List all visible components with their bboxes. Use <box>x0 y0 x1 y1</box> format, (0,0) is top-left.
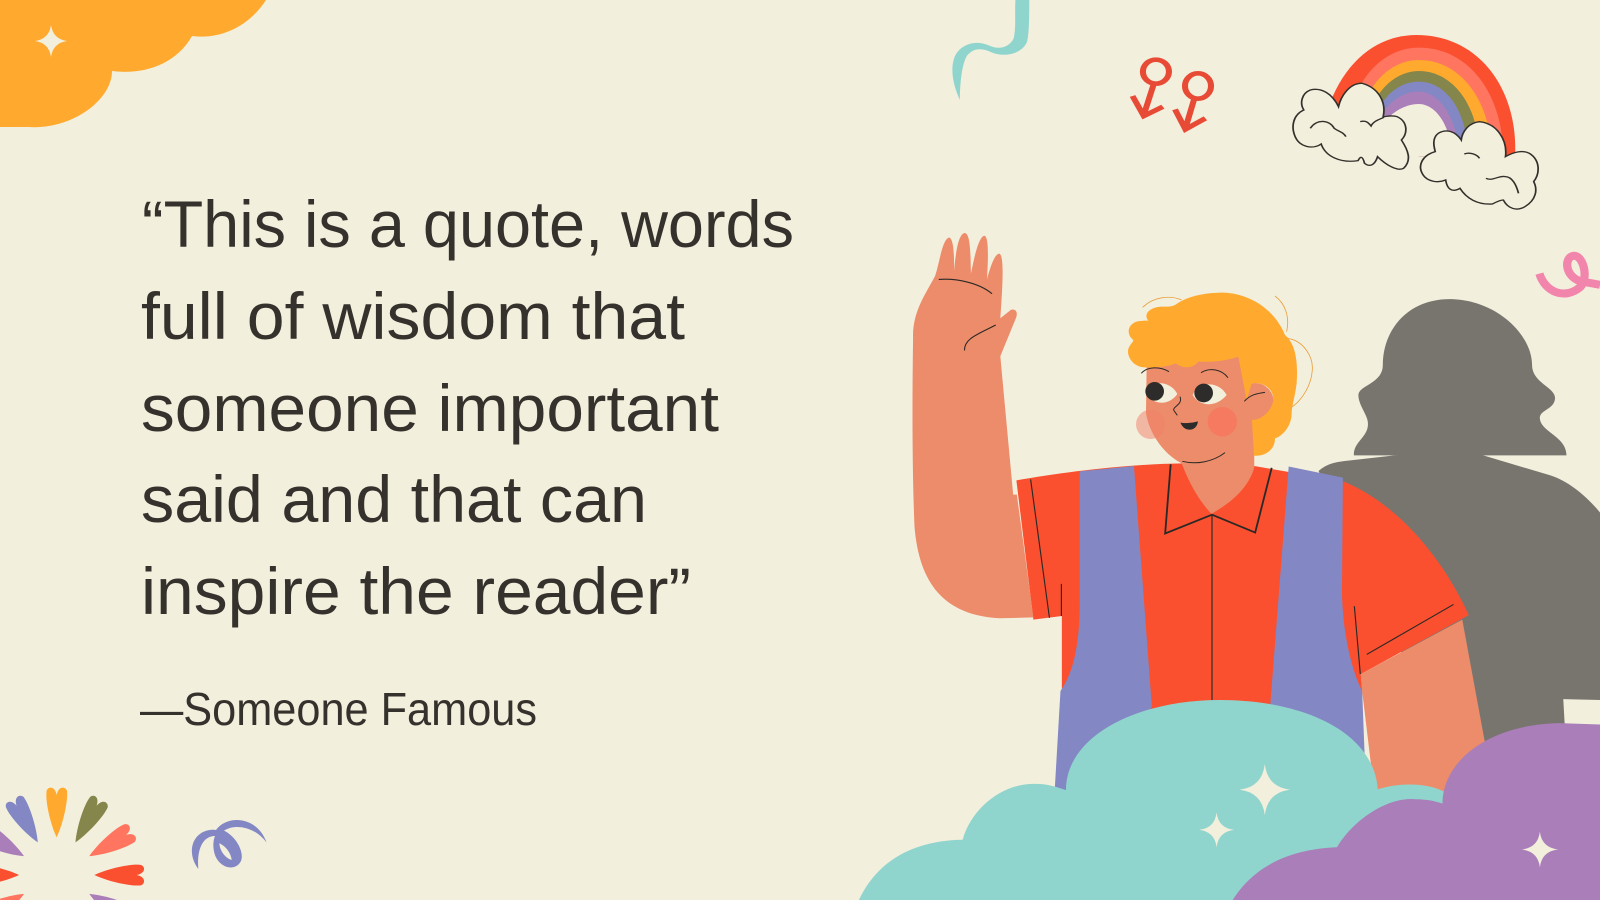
attribution: —Someone Famous <box>140 683 537 735</box>
hair <box>1128 293 1297 456</box>
right cheek <box>1208 407 1237 436</box>
sparkle on purple cloud <box>1522 832 1558 867</box>
rainbow arcs <box>1330 35 1515 157</box>
mouth <box>1180 421 1198 430</box>
right arm <box>1361 620 1486 825</box>
quote text: inspire the reader” <box>141 554 691 628</box>
quote text: “This is a quote, words <box>142 187 794 261</box>
ear <box>1236 383 1274 420</box>
icon: pink ribbon <box>1539 256 1600 293</box>
face <box>1146 353 1254 464</box>
head <box>1128 293 1312 464</box>
eyes <box>1145 382 1227 404</box>
quote text <box>141 187 794 628</box>
facial lines <box>1141 368 1265 463</box>
quote text: someone important <box>141 371 719 445</box>
icon: blue squiggle <box>192 820 267 869</box>
orange cloud top-left <box>0 0 266 127</box>
collar <box>1165 464 1272 533</box>
quote text: said and that can <box>141 462 647 536</box>
vest <box>1054 466 1365 794</box>
shirt and hand lines <box>939 279 1454 702</box>
neck <box>1182 423 1254 514</box>
left cheek <box>1136 410 1165 439</box>
purple cloud <box>1233 723 1600 900</box>
shirt <box>1016 463 1469 762</box>
clouds foreground <box>859 700 1600 900</box>
person waving <box>912 233 1486 825</box>
stray hairs <box>1143 296 1312 408</box>
teal cloud <box>859 700 1444 900</box>
right cloud <box>1421 122 1538 209</box>
left cloud <box>1293 83 1408 169</box>
icon: teal ribbon <box>952 0 1029 100</box>
icon: red arrows <box>1133 60 1211 129</box>
icon: heart burst <box>0 788 144 900</box>
quote text: full of wisdom that <box>141 279 685 353</box>
raised arm and hand <box>912 233 1033 618</box>
sparkles on teal cloud <box>1199 764 1290 847</box>
icon: rainbow with clouds <box>1293 35 1538 209</box>
silhouette shadow <box>1319 299 1600 771</box>
